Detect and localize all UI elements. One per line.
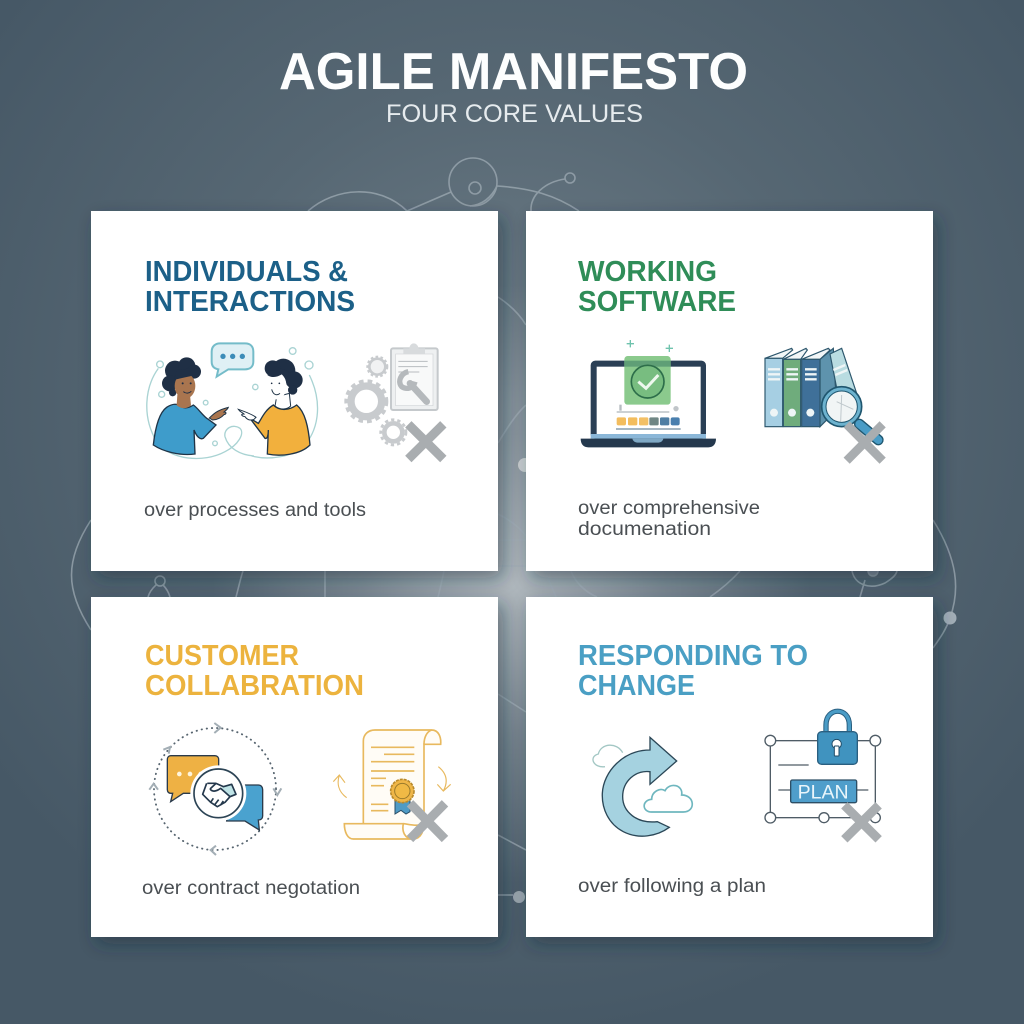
text: over following a plan: over following a plan [578, 876, 766, 897]
icon: cross [847, 424, 883, 461]
panel: customer collaboration [91, 597, 498, 937]
icon: locked plan [765, 711, 881, 839]
heading: working software: WORKING [578, 256, 717, 288]
icon: clipboard [391, 343, 438, 410]
icon: two people talking [147, 343, 443, 459]
heading: responding to change: RESPONDING TO [578, 640, 808, 672]
heading: responding to change [578, 640, 808, 702]
icon: handshake with speech bubbles [149, 723, 281, 855]
heading: individuals and interactions [145, 256, 355, 318]
heading: individuals and interactions: INDIVIDUALS & [145, 256, 348, 288]
icon: locked plan: PLAN [798, 783, 849, 804]
text: over contract negotation: over contract negotation [142, 878, 360, 899]
icon: binders with magnifier [765, 348, 883, 461]
heading: responding to change: CHANGE [578, 670, 695, 702]
speech bubble [212, 343, 253, 377]
text: over comprehensive documenation [578, 498, 760, 540]
icon: contract scroll [333, 730, 451, 839]
icon: cross [410, 803, 445, 839]
icon: laptop with check [581, 340, 716, 447]
heading: customer collaboration: COLLABRATION [145, 670, 364, 702]
left person [153, 357, 228, 454]
icon: circular arrow with clouds [593, 737, 692, 836]
heading: customer collaboration: CUSTOMER [145, 640, 299, 672]
heading: working software [578, 256, 736, 318]
heading: working software: SOFTWARE [578, 286, 736, 318]
icon: gears [346, 357, 406, 445]
icon: cross [408, 424, 443, 459]
heading: customer collaboration [145, 640, 364, 702]
heading: individuals and interactions: INTERACTIONS [145, 286, 355, 318]
panel: working software [526, 211, 933, 571]
text: over comprehensive documenation: documenation [578, 519, 711, 540]
title: AGILE MANIFESTO [279, 43, 748, 101]
text: over comprehensive documenation: over comprehensive [578, 498, 760, 519]
blue speech bubble [227, 785, 263, 830]
icon: cross [844, 805, 879, 839]
handshake [203, 783, 236, 807]
panel: responding to change [526, 597, 933, 937]
panel: individuals and interactions [91, 211, 498, 571]
yellow speech bubble [167, 756, 219, 802]
subtitle: FOUR CORE VALUES [386, 100, 643, 128]
right person [238, 359, 310, 455]
text: over processes and tools: over processes and tools [144, 500, 366, 521]
